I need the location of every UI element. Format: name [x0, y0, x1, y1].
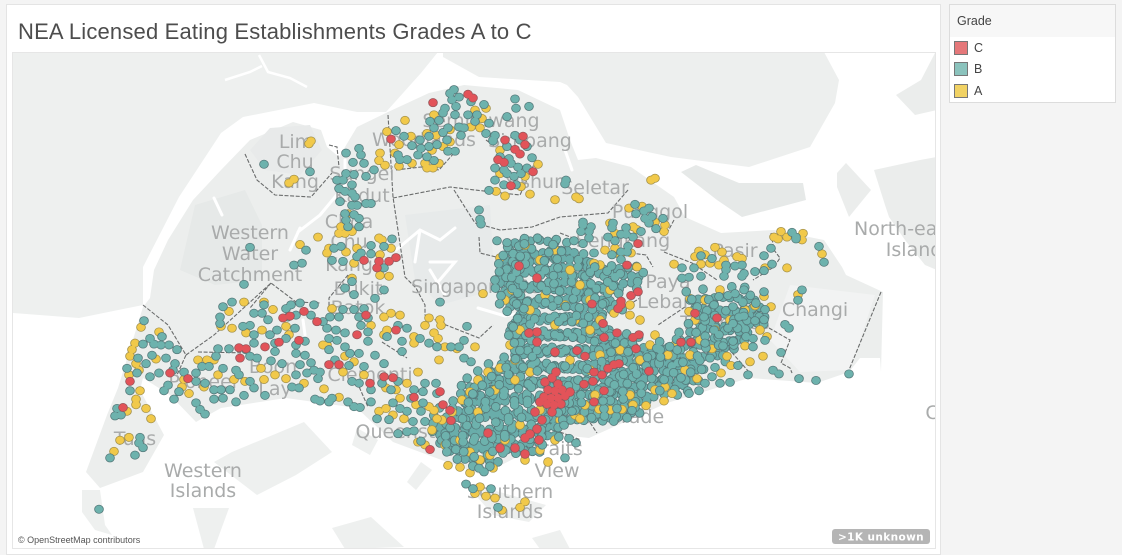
legend panel: [949, 4, 1116, 103]
place name labels: Yishun: [503, 171, 566, 193]
unknown count badge: >1K unknown: [838, 532, 924, 544]
parks and reservoirs: [212, 125, 574, 336]
place name labels: Southern: [467, 481, 553, 503]
place name labels: Punggol: [612, 201, 688, 223]
place name labels: Tampines: [679, 312, 770, 334]
establishment dots: teal grade B: [99, 90, 849, 509]
place name labels: Straits: [521, 438, 583, 460]
place name labels: Singapore: [411, 276, 507, 298]
place name labels: Kang: [271, 171, 319, 193]
legend heading: Grade: [957, 14, 992, 28]
place name labels: Water: [222, 243, 278, 265]
land: Johor and offshore islands: [13, 52, 937, 318]
place name labels: Seletar: [561, 177, 629, 199]
place name labels: Sengkang: [576, 230, 670, 252]
map: [12, 52, 936, 549]
land: Singapore main island: [86, 85, 883, 488]
map attribution: © OpenStreetMap contributors: [18, 535, 141, 545]
place name labels: Kadut: [334, 185, 390, 207]
place name labels: Islands: [170, 480, 236, 502]
legend item A: A: [974, 84, 982, 98]
place name labels: Lebar: [637, 291, 691, 313]
place name labels: Sembawang: [422, 110, 540, 132]
place name labels: Choa: [325, 211, 373, 233]
place name labels: Batok: [331, 297, 385, 319]
place name labels: Chu: [276, 151, 314, 173]
legend item C: [954, 41, 983, 55]
place name labels: Lay: [258, 378, 292, 400]
legend item C: C: [974, 41, 983, 55]
place name labels: Paya: [645, 271, 691, 293]
place name labels: Simpang: [488, 130, 572, 152]
place name labels: Clementi: [327, 364, 413, 386]
establishment dots: dense teal grade B clusters: [431, 229, 774, 479]
place name labels: Boon: [249, 356, 297, 378]
place name labels: Marine Parade: [528, 406, 664, 428]
land: southern islands: [82, 422, 570, 549]
place name labels: Kang: [325, 254, 373, 276]
place name labels: [113, 110, 986, 523]
place name labels: Chu: [330, 231, 368, 253]
place name labels: Changi: [782, 299, 848, 321]
place name labels: Tuas: [113, 428, 156, 450]
establishment dots: red grade C: [123, 94, 717, 454]
place name labels: Western: [211, 222, 289, 244]
place name labels: Woodlands: [372, 129, 476, 151]
place name labels: Pasir: [712, 240, 758, 262]
place name labels: Pioneer: [168, 371, 240, 393]
place name labels: View: [534, 460, 580, 482]
place name labels: Islands: [477, 501, 543, 523]
legend heading: [950, 5, 1115, 37]
place name labels: Sungei: [329, 163, 395, 185]
place name labels: Western: [164, 460, 242, 482]
place name labels: Catchment: [198, 264, 302, 286]
planning area boundaries: [143, 115, 881, 440]
place name labels: Bukit: [334, 278, 382, 300]
title: NEA Licensed Eating Establishments Grades A to C: [18, 19, 532, 44]
place name labels: Lim: [279, 131, 313, 153]
legend item B: B: [974, 62, 982, 76]
place name labels: Queenstown: [356, 421, 474, 443]
legend item B: [954, 62, 982, 76]
legend item A: [954, 84, 982, 98]
place name labels: Serangoon: [517, 276, 619, 298]
establishment dots: yellow grade A: [114, 108, 822, 510]
